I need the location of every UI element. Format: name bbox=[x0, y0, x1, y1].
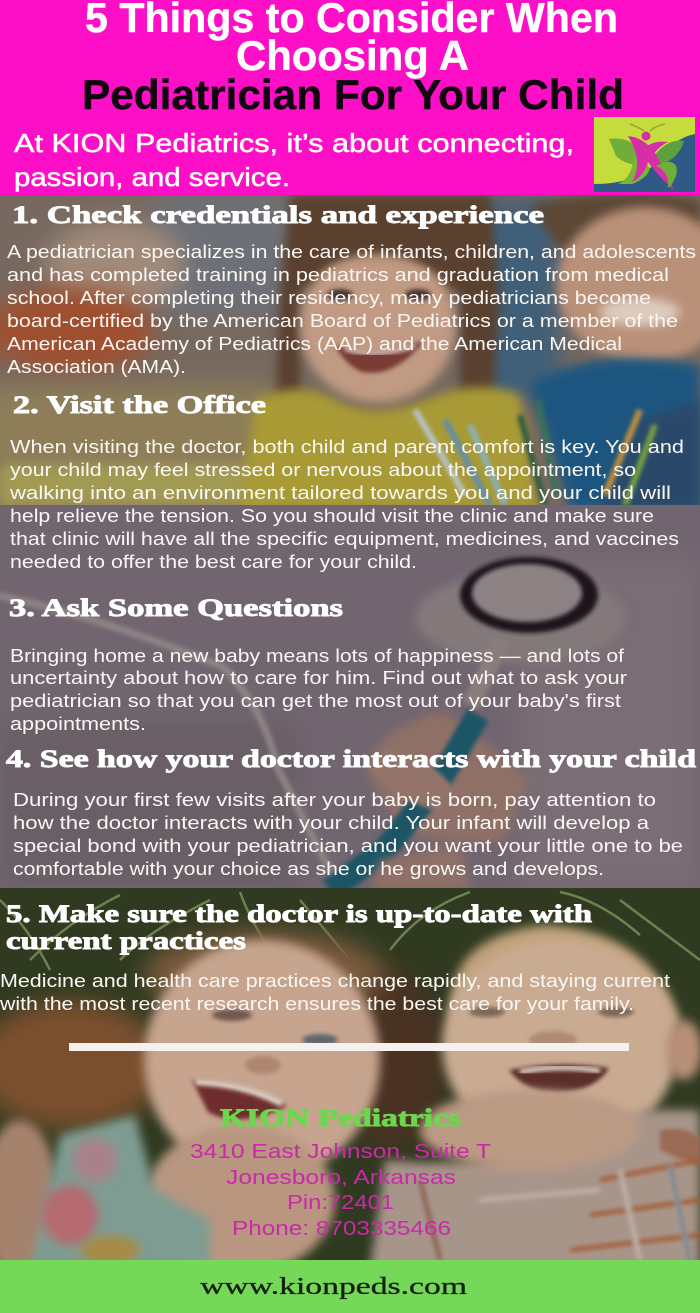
section 5 heading: current practices bbox=[6, 928, 246, 955]
section 3 text: Bringing home a new baby means lots of happiness — and lots of bbox=[10, 646, 625, 666]
clinic address: Jonesboro, Arkansas bbox=[226, 1167, 456, 1189]
section 2 text: that clinic will have all the specific equipment, medicines, and vaccines bbox=[10, 529, 679, 549]
title: Pediatrician For Your Child bbox=[82, 71, 624, 118]
section 1 text: Association (AMA). bbox=[7, 357, 186, 377]
section 4 text: how the doctor interacts with your child. Your infant will develop a bbox=[13, 813, 650, 833]
clinic address bbox=[190, 1141, 491, 1240]
section 5 text: Medicine and health care practices change rapidly, and staying current bbox=[0, 971, 670, 991]
section 4 heading: 4. See how your doctor interacts with your child bbox=[6, 746, 696, 773]
section 1 text bbox=[7, 242, 696, 377]
photo: children with pencils bbox=[0, 194, 700, 525]
section 5 heading bbox=[6, 901, 592, 955]
section 3 heading: 3. Ask Some Questions bbox=[9, 595, 343, 622]
section 5 heading: 5. Make sure the doctor is up-to-date with bbox=[6, 901, 592, 928]
footer band bbox=[0, 1260, 700, 1313]
title bbox=[82, 0, 624, 118]
photo: stethoscope and baby hand bbox=[0, 505, 700, 890]
clinic address: 3410 East Johnson, Suite T bbox=[190, 1141, 491, 1163]
section 1 text: school. After completing their residency, many pediatricians become bbox=[7, 288, 651, 308]
section 2 text: needed to offer the best care for your child. bbox=[10, 552, 417, 572]
section 1 text: American Academy of Pediatrics (AAP) and the American Medical bbox=[7, 334, 622, 354]
clinic address: Pin:72401 bbox=[287, 1192, 394, 1214]
section 1 heading: 1. Check credentials and experience bbox=[12, 202, 544, 229]
section 4 text: comfortable with your choice as she or he grows and develops. bbox=[13, 859, 604, 879]
section 2 text: walking into an environment tailored towards you and your child will bbox=[9, 483, 671, 503]
section 2 heading: 2. Visit the Office bbox=[13, 392, 266, 419]
section 5 text bbox=[0, 971, 670, 1014]
section 4 text: special bond with your pediatrician, and you want your little one to be bbox=[13, 836, 683, 856]
section 2 text bbox=[9, 437, 684, 572]
section 2 text: When visiting the doctor, both child and parent comfort is key. You and bbox=[10, 437, 684, 457]
section 3 text: appointments. bbox=[10, 714, 146, 734]
header banner bbox=[0, 0, 700, 195]
section 5 text: with the most recent research ensures the best care for your family. bbox=[0, 994, 634, 1014]
section 4 text bbox=[13, 790, 683, 879]
photo: two laughing children bbox=[0, 888, 700, 1280]
section 1 text: A pediatrician specializes in the care of infants, children, and adolescents bbox=[7, 242, 696, 262]
section 2 text: help relieve the tension. So you should visit the clinic and make sure bbox=[10, 506, 654, 526]
divider bar bbox=[69, 1043, 629, 1051]
website url: www.kionpeds.com bbox=[200, 1274, 467, 1300]
tagline: passion, and service. bbox=[14, 162, 290, 192]
tagline bbox=[14, 128, 574, 192]
section 1 text: board-certified by the American Board of Pediatrics or a member of the bbox=[7, 311, 678, 331]
section 3 text: uncertainty about how to care for him. Find out what to ask your bbox=[10, 668, 627, 688]
icon: KION butterfly logo bbox=[594, 117, 695, 192]
clinic name: KION Pediatrics bbox=[220, 1105, 461, 1132]
section 4 text: During your first few visits after your baby is born, pay attention to bbox=[13, 790, 656, 810]
section 3 text: pediatrician so that you can get the most out of your baby's first bbox=[10, 691, 621, 711]
clinic address: Phone: 8703335466 bbox=[232, 1218, 451, 1240]
tagline: At KION Pediatrics, it’s about connecting, bbox=[14, 128, 574, 158]
section 3 text bbox=[10, 646, 627, 734]
section 2 text: your child may feel stressed or nervous about the appointment, so bbox=[10, 460, 636, 480]
section 1 text: and has completed training in pediatrics and graduation from medical bbox=[7, 265, 669, 285]
title: Choosing A bbox=[236, 32, 469, 79]
